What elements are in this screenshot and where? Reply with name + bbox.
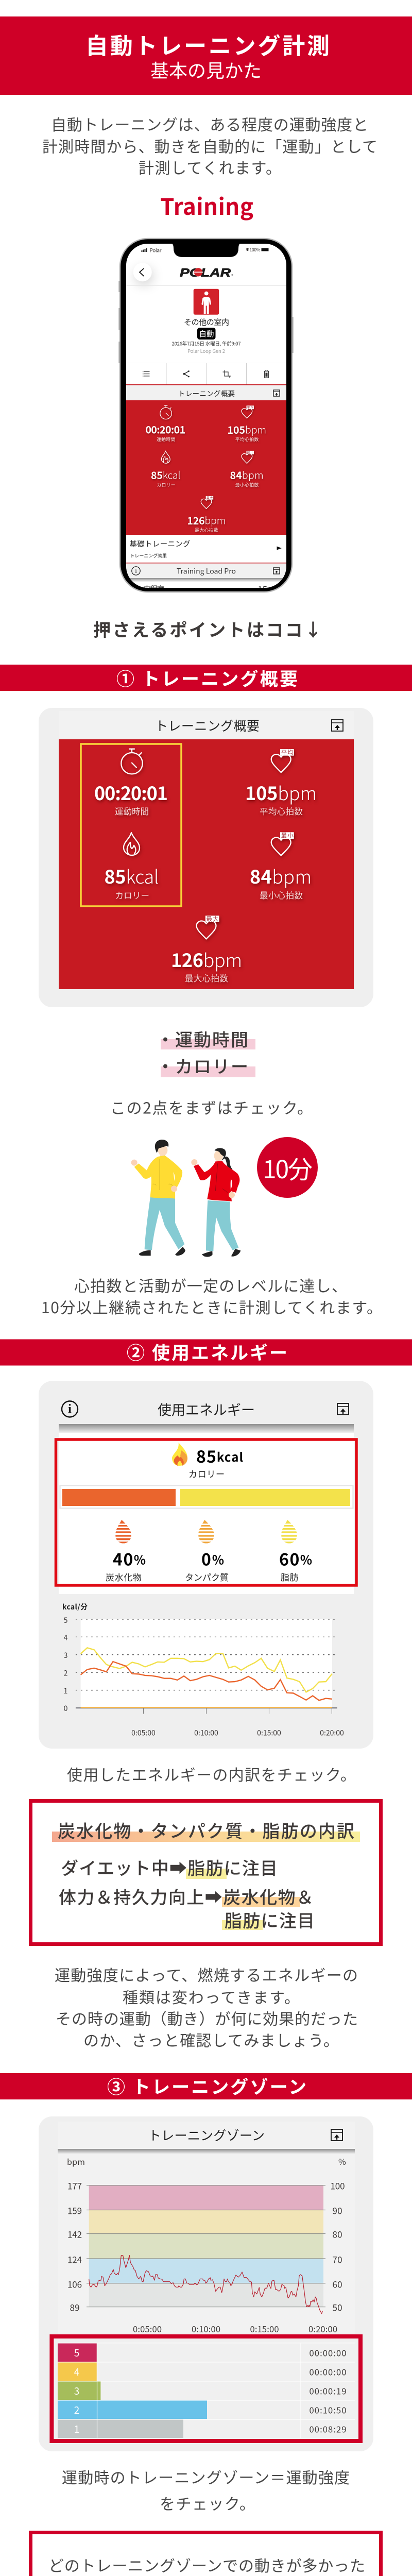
zone 5 row bbox=[58, 2343, 346, 2362]
metric: calories: 85kcal bbox=[104, 862, 159, 889]
phone screen: 85kcal bbox=[151, 467, 181, 482]
section 1 band bbox=[0, 665, 412, 691]
energy split bar bbox=[60, 1486, 353, 1509]
phone screen: 運動時間 bbox=[157, 436, 175, 443]
phone bar: training overview bbox=[126, 385, 286, 400]
section 3 band bbox=[0, 2073, 412, 2099]
phone row: basic training: トレーニング効果 bbox=[130, 552, 167, 559]
phone screen: 平均心拍数 bbox=[235, 436, 259, 443]
text: measurement condition: 心拍数と活動が一定のレベルに達し、 bbox=[74, 1274, 347, 1296]
panel heading: 使用エネルギー bbox=[158, 1399, 255, 1419]
metric: calories: カロリー bbox=[115, 889, 149, 901]
metric: maximum heart rate: 126bpm bbox=[171, 946, 242, 973]
panel: energy used bbox=[39, 1381, 373, 1749]
badge: 10 minutes bbox=[257, 1137, 318, 1198]
notch bbox=[172, 244, 240, 257]
zone chart: 124 bbox=[67, 2252, 82, 2266]
text: check these two: この2点をまずはチェック。 bbox=[110, 1096, 313, 1118]
zone chart: 70 bbox=[333, 2252, 342, 2266]
phone screen bbox=[126, 242, 286, 596]
Polar logo: POLAR bbox=[180, 266, 231, 279]
Polar logo bbox=[179, 268, 233, 277]
icon: export bbox=[332, 720, 343, 731]
intro text: 計測してくれます。 bbox=[139, 156, 281, 178]
icon: carbohydrate drop bbox=[115, 1520, 132, 1544]
callout lines: 脂肪に注目 bbox=[225, 1907, 315, 1932]
line chart: kcal per minute: 5 bbox=[64, 1615, 68, 1625]
phone screen: 00:20:01 bbox=[145, 421, 185, 436]
key items: duration and calories: ・運動時間 bbox=[157, 1026, 248, 1051]
text: intensity and energy: 種類は変わってきます。 bbox=[123, 1985, 300, 2008]
phone row: basic training: 基礎トレーニング bbox=[130, 538, 191, 549]
metric: minimum heart rate: 最小 bbox=[281, 832, 294, 840]
phone bar: training load pro bbox=[126, 564, 286, 588]
text: measurement condition bbox=[41, 1274, 382, 1318]
text: intensity and energy: のか、さっと確認してみましょう。 bbox=[83, 2028, 339, 2050]
text: check training zones: 運動時のトレーニングゾーン＝運動強度 bbox=[62, 2465, 350, 2488]
phone screen: 最大 bbox=[207, 496, 213, 500]
zone chart bbox=[67, 2155, 346, 2335]
percentages: タンパク質 bbox=[185, 1570, 229, 1583]
red highlight box bbox=[56, 1439, 356, 1585]
title: 自動トレーニング計測 bbox=[85, 28, 330, 61]
section 2 band: ② 使用エネルギー bbox=[127, 1338, 287, 1365]
zone 4 row bbox=[58, 2363, 346, 2381]
phone screen: 平均 bbox=[247, 405, 253, 410]
zone chart: 50 bbox=[333, 2301, 342, 2313]
metric: average heart rate: 105bpm bbox=[245, 779, 317, 806]
zone 5 row: 5 bbox=[74, 2346, 79, 2360]
zone 3 row: 00:00:19 bbox=[309, 2384, 346, 2397]
metric: average heart rate bbox=[245, 748, 317, 817]
section 3 band: ③ トレーニングゾーン bbox=[107, 2073, 306, 2099]
text: check training zones: をチェック。 bbox=[160, 2492, 255, 2514]
phone row: basic training bbox=[130, 540, 282, 558]
section 1 band: ① トレーニング概要 bbox=[116, 665, 298, 691]
heading: key points: 押さえるポイントはココ↓ bbox=[93, 616, 322, 641]
callout: energy breakdown bbox=[31, 1801, 381, 1944]
zone 4 row: 00:00:00 bbox=[309, 2366, 346, 2378]
line chart: kcal per minute: 0:05:00 bbox=[131, 1728, 156, 1738]
icon: flame bbox=[172, 1443, 187, 1466]
section 2 band bbox=[0, 1338, 412, 1365]
status bar bbox=[141, 248, 269, 252]
status bar: Polar bbox=[149, 246, 162, 253]
metric: minimum heart rate: 最小心拍数 bbox=[260, 889, 303, 901]
callout: zone effects bbox=[31, 2533, 381, 2576]
zone 4 row: 4 bbox=[74, 2365, 79, 2379]
percentages: 60% bbox=[279, 1547, 312, 1570]
metric: maximum heart rate: 最大 bbox=[206, 915, 219, 923]
text: intensity and energy: 運動強度によって、燃焼するエネルギーの bbox=[55, 1963, 358, 1986]
phone screen: 105bpm bbox=[228, 421, 266, 436]
metric: duration: 運動時間 bbox=[115, 805, 149, 817]
zone 3 row bbox=[58, 2381, 346, 2400]
icon: export bbox=[331, 2129, 342, 2141]
line chart: kcal per minute: 4 bbox=[64, 1632, 68, 1642]
callout lines: 体力＆持久力向上➡炭水化物＆ bbox=[59, 1884, 314, 1909]
callout lines bbox=[59, 1855, 315, 1932]
zone chart: 90 bbox=[333, 2204, 342, 2216]
line chart: kcal per minute bbox=[62, 1602, 344, 1738]
callout intro: どのトレーニングゾーンでの動きが多かった bbox=[48, 2553, 365, 2576]
metric: average heart rate: 平均心拍数 bbox=[260, 805, 303, 817]
phone bar: training load pro: 中程度 bbox=[143, 583, 164, 595]
phone screen: 最大心拍数 bbox=[195, 527, 218, 533]
status bar: ✱ bbox=[246, 247, 249, 252]
metric: minimum heart rate bbox=[250, 832, 312, 901]
badge: auto: 自動 bbox=[199, 329, 214, 339]
metric: average heart rate: 平均 bbox=[281, 748, 294, 756]
text: intensity and energy bbox=[55, 1963, 358, 2050]
line chart: kcal per minute: kcal/分 bbox=[62, 1602, 88, 1612]
percentages: 炭水化物 bbox=[106, 1570, 142, 1583]
heading: Training: Training bbox=[160, 189, 253, 222]
zone 5 row: 00:00:00 bbox=[309, 2346, 346, 2359]
zone 2 row bbox=[58, 2401, 346, 2419]
intro text: 自動トレーニングは、ある程度の運動強度と bbox=[51, 112, 368, 135]
illustration: man and woman walking bbox=[131, 1140, 241, 1257]
phone screen: 126bpm bbox=[187, 512, 226, 527]
phone screen: 最小心拍数 bbox=[235, 481, 259, 488]
zone chart: 106 bbox=[67, 2277, 82, 2291]
calories value: 85kcal bbox=[196, 1444, 243, 1468]
zone chart: % bbox=[338, 2155, 346, 2167]
panel: training zones bbox=[39, 2116, 373, 2451]
percentages: 脂肪 bbox=[281, 1570, 299, 1583]
key items: duration and calories bbox=[157, 1026, 255, 1078]
phone bar: training load pro: i bbox=[135, 567, 137, 574]
line chart: kcal per minute: 3 bbox=[64, 1650, 67, 1660]
intro text bbox=[42, 112, 377, 178]
metric: duration: 00:20:01 bbox=[94, 779, 168, 806]
toolbar bbox=[126, 363, 286, 384]
woman bbox=[191, 1148, 241, 1257]
phone screen: カロリー bbox=[157, 481, 176, 488]
zone 2 row: 2 bbox=[74, 2403, 79, 2417]
activity icon bbox=[194, 289, 219, 315]
intro text: 計測時間から、動きを自動的に「運動」として bbox=[42, 134, 377, 157]
line chart: kcal per minute: 0:10:00 bbox=[194, 1728, 218, 1738]
phone bar: training overview: トレーニング概要 bbox=[178, 388, 235, 398]
zone chart: 80 bbox=[333, 2228, 342, 2240]
zone chart: 142 bbox=[67, 2228, 82, 2240]
metrics bbox=[94, 748, 317, 984]
callout lines: ダイエット中➡脂肪に注目 bbox=[61, 1855, 278, 1879]
phone bar: training load pro: Training Load Pro bbox=[177, 566, 236, 576]
phone mockup bbox=[118, 239, 294, 596]
percentages bbox=[106, 1547, 312, 1583]
icon: info: i bbox=[68, 1402, 72, 1416]
zone chart: 60 bbox=[333, 2277, 342, 2291]
icon: protein drop bbox=[198, 1520, 215, 1544]
badge: 10 minutes: 10分 bbox=[263, 1149, 313, 1185]
icon: fat drop bbox=[281, 1520, 298, 1544]
zone 1 row: 00:08:29 bbox=[309, 2422, 346, 2435]
key items: duration and calories: ・カロリー bbox=[157, 1053, 248, 1078]
zone 1 row: 1 bbox=[74, 2422, 79, 2436]
zone 1 row bbox=[58, 2419, 346, 2438]
date: 2026年7月15日 水曜日, 午前9:07 bbox=[172, 340, 241, 347]
calories label: カロリー bbox=[188, 1467, 225, 1480]
panel heading: トレーニング概要 bbox=[155, 716, 260, 735]
yellow highlight box bbox=[81, 744, 181, 906]
text: intensity and energy: その時の運動（動き）が何に効果的だった bbox=[56, 2006, 358, 2029]
line chart: kcal per minute: 2 bbox=[64, 1668, 68, 1679]
highlights bbox=[52, 1832, 360, 1930]
percentages: 0% bbox=[201, 1547, 224, 1570]
activity name: その他の室内 bbox=[184, 316, 229, 328]
zone chart: bpm bbox=[67, 2155, 85, 2167]
text: measurement condition: 10分以上継続されたときに計測してくれます。 bbox=[41, 1295, 382, 1318]
icon: export bbox=[337, 1403, 349, 1415]
text: check energy breakdown: 使用したエネルギーの内訳をチェック。 bbox=[67, 1762, 356, 1785]
zone time table bbox=[52, 2336, 360, 2441]
metric: calories bbox=[104, 833, 159, 901]
metric: minimum heart rate: 84bpm bbox=[250, 862, 312, 889]
metric: duration bbox=[94, 749, 168, 817]
line chart: kcal per minute: 1 bbox=[64, 1686, 67, 1696]
phone screen: 84bpm bbox=[230, 467, 264, 482]
zone chart: 0:20:00 bbox=[308, 2323, 337, 2335]
zone chart: 100 bbox=[331, 2179, 345, 2192]
percentages: 40% bbox=[113, 1547, 146, 1570]
zone chart: 0:05:00 bbox=[133, 2323, 162, 2335]
phone red summary bbox=[126, 400, 286, 535]
zone chart: 0:15:00 bbox=[250, 2323, 279, 2335]
subtitle: 基本の見かた bbox=[150, 56, 262, 83]
line chart: kcal per minute: 0 bbox=[64, 1703, 68, 1714]
text: check training zones bbox=[62, 2465, 350, 2514]
status bar: 100% bbox=[249, 247, 261, 253]
metric: maximum heart rate bbox=[171, 915, 242, 984]
back button bbox=[133, 263, 152, 281]
panel heading: トレーニングゾーン bbox=[148, 2126, 265, 2144]
zone chart: 159 bbox=[67, 2204, 82, 2216]
device: Polar Loop Gen 2 bbox=[187, 347, 225, 354]
header band bbox=[0, 16, 412, 95]
red summary area bbox=[59, 739, 354, 989]
phone screen: 最小 bbox=[247, 450, 254, 455]
zone 3 row: 3 bbox=[74, 2384, 79, 2398]
line chart: kcal per minute: 0:20:00 bbox=[320, 1728, 344, 1738]
zone chart: 177 bbox=[67, 2179, 82, 2192]
red highlight box bbox=[52, 2336, 360, 2441]
line chart: kcal per minute: 0:15:00 bbox=[257, 1728, 281, 1738]
callout heading: 炭水化物・タンパク質・脂肪の内訳 bbox=[58, 1818, 354, 1842]
phone bar: training load pro: 15 bbox=[258, 582, 267, 596]
zone chart: 0:10:00 bbox=[192, 2323, 220, 2335]
man bbox=[131, 1140, 185, 1256]
icon: info bbox=[62, 1401, 78, 1417]
zone 2 row: 00:10:50 bbox=[309, 2404, 346, 2416]
zone chart: 89 bbox=[70, 2301, 79, 2313]
metric: maximum heart rate: 最大心拍数 bbox=[185, 972, 228, 984]
panel: training overview bbox=[39, 708, 373, 1007]
